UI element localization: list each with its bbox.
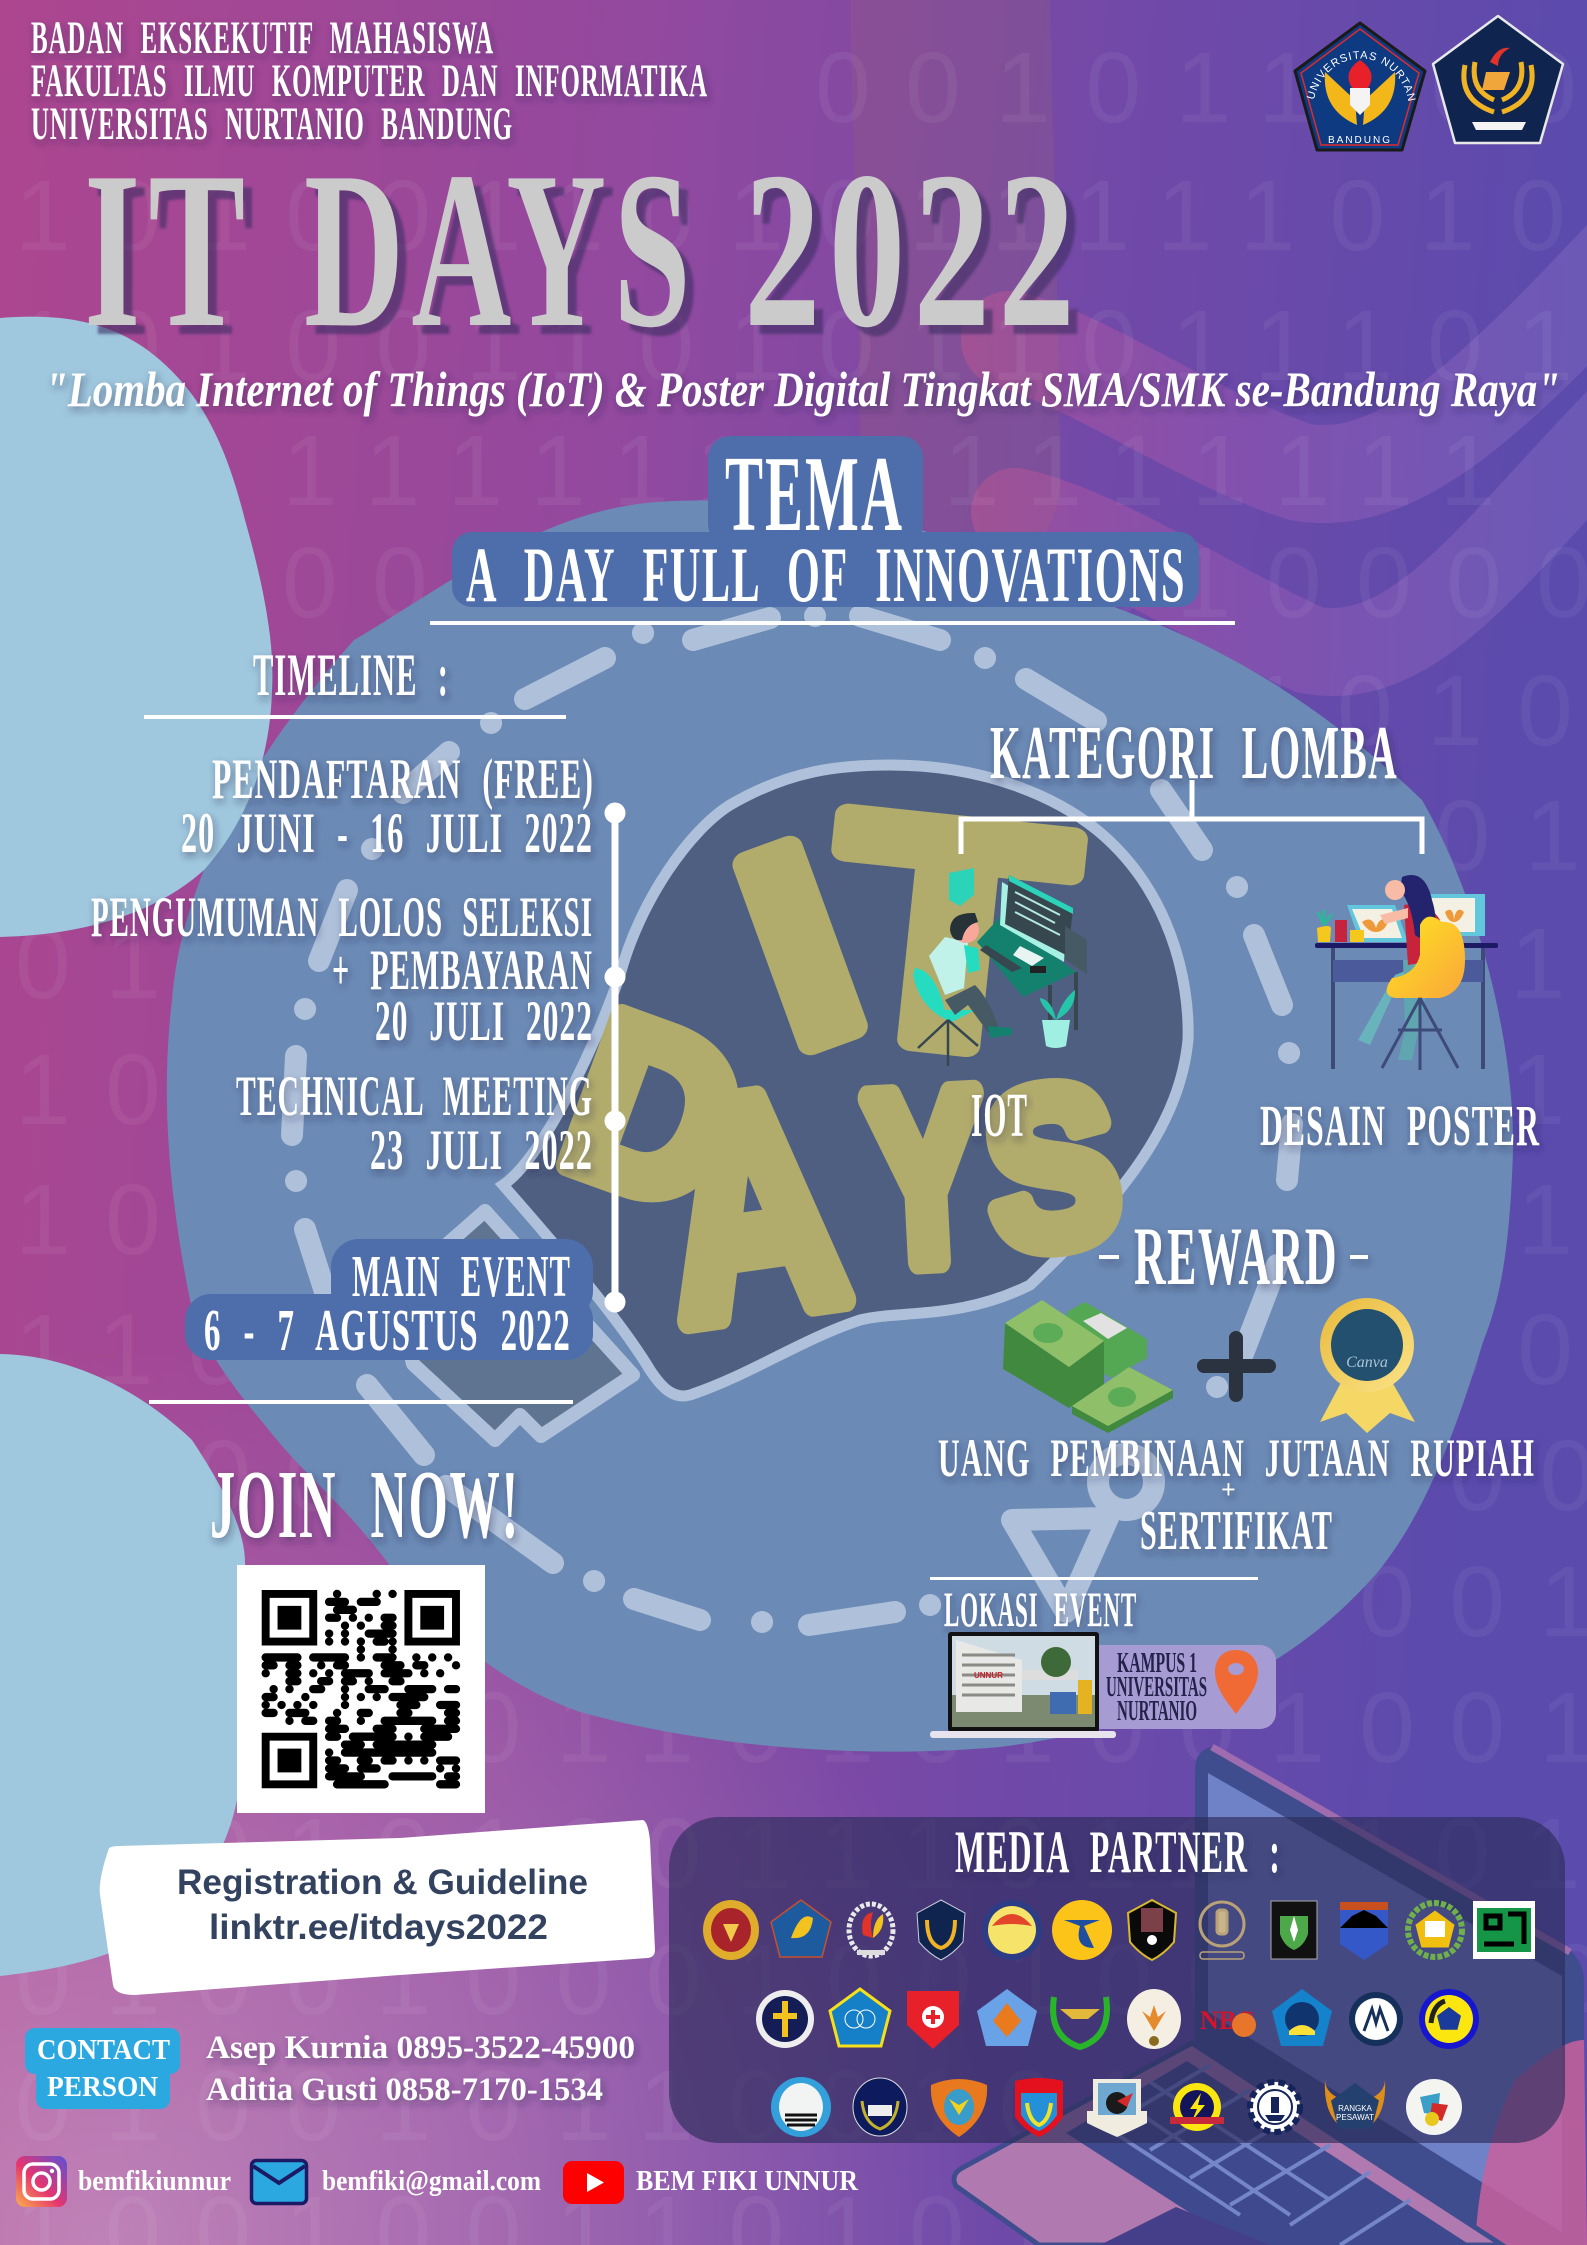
header organisation text: UNIVERSITAS NURTANIO BANDUNG bbox=[31, 98, 513, 150]
icon: certificate medal: Canva bbox=[1346, 1354, 1388, 1371]
location name: KAMPUS 1 bbox=[1117, 1647, 1197, 1679]
panel: media partner bbox=[669, 1817, 1565, 2143]
IT DAYS logo lettering: D bbox=[536, 964, 774, 1260]
registration banner bbox=[100, 1820, 655, 1995]
background binary pattern: 010010110010110100 bbox=[15, 2050, 1587, 2162]
logo: blue ring stripes bbox=[771, 2077, 831, 2137]
logo: orange shield bbox=[931, 2079, 987, 2137]
background binary pattern: 101001101011011101 bbox=[15, 290, 1587, 402]
background binary pattern: 101101001101001111 bbox=[15, 1034, 1587, 1146]
logo: yellow circle bbox=[1052, 1900, 1112, 1960]
dashed circle with arrow bbox=[292, 616, 1292, 1625]
main event badge: MAIN EVENT bbox=[352, 1243, 571, 1309]
IT DAYS logo lettering: I bbox=[707, 786, 894, 1105]
contact names and numbers bbox=[206, 2030, 635, 2108]
reward description bbox=[938, 1428, 1535, 1562]
category bracket bbox=[961, 780, 1422, 854]
logo: white laurel bbox=[849, 1904, 893, 1956]
youtube channel: BEM FIKI UNNUR bbox=[636, 2166, 859, 2197]
main title bbox=[84, 126, 1083, 374]
logo: NBC basketball: NBC bbox=[1200, 2006, 1255, 2035]
technical meeting dates: TECHNICAL MEETING bbox=[236, 1065, 593, 1128]
background binary pattern: 101001101011111010 bbox=[15, 160, 1587, 272]
logo: himapala blue bbox=[1340, 1902, 1388, 1960]
IT DAYS logo lettering: Y bbox=[861, 1042, 989, 1316]
logo: white M circle bbox=[1349, 1992, 1403, 2046]
contact names and numbers: Asep Kurnia 0895-3522-45900 bbox=[206, 2030, 635, 2066]
background binary pattern: 101001010110100001 bbox=[15, 1546, 1587, 1658]
big blue blob bbox=[167, 500, 1513, 1752]
icon: map pin bbox=[1215, 1650, 1258, 1714]
location laptop photo: UNNUR bbox=[974, 1671, 1003, 1680]
icon: youtube bbox=[563, 2161, 624, 2204]
logo: yellow sun crest bbox=[982, 1900, 1042, 1960]
location name: UNIVERSITAS bbox=[1106, 1671, 1207, 1703]
partner logos row 2 bbox=[756, 1989, 1479, 2049]
logo: black music shield bbox=[1128, 1900, 1176, 1960]
logo: blue pentagon bbox=[771, 1900, 831, 1957]
theme label: TEMA bbox=[725, 435, 904, 554]
partner logos row 3 bbox=[771, 2077, 1462, 2137]
timeline panel bbox=[91, 642, 626, 1363]
logo: rangka pesawat wings: RANGKA bbox=[1338, 2104, 1373, 2113]
IT DAYS logo lettering bbox=[536, 748, 1129, 1387]
logo: green laurel wings bbox=[1053, 1997, 1107, 2047]
lightbulb base bbox=[395, 1211, 633, 1440]
registration text: Registration & Guideline bbox=[177, 1863, 588, 1902]
logo: yellow blue circle bbox=[1419, 1989, 1479, 2049]
logo: green square bbox=[1473, 1901, 1535, 1959]
header organisation text: BADAN EKSKEKUTIF MAHASISWA bbox=[31, 12, 494, 64]
background binary pattern: 010100110101001001 bbox=[15, 1672, 1587, 1784]
main event badge: 6 - 7 AGUSTUS 2022 bbox=[204, 1297, 571, 1363]
icon: certificate medal bbox=[1320, 1298, 1415, 1433]
icon: email envelope bbox=[252, 2160, 306, 2204]
background wave bands bbox=[950, 0, 1587, 652]
background binary pattern: 110010110011010101 bbox=[15, 780, 1587, 892]
logo: blue pentagon yellow book bbox=[1272, 1989, 1332, 2046]
background binary pattern: 100101001110110101 bbox=[15, 1798, 1587, 1910]
background binary pattern: 011010010110101111 bbox=[15, 908, 1587, 1020]
registration link: linktr.ee/itdays2022 bbox=[209, 1908, 548, 1947]
logo: tan microphone bbox=[1200, 1902, 1244, 1959]
icon: programmer at desk bbox=[913, 868, 1087, 1066]
instagram handle: bemfikiunnur bbox=[78, 2166, 231, 2197]
QR code bbox=[237, 1565, 485, 1813]
icon: plus sign bbox=[1204, 1338, 1269, 1395]
logo: Universitas Nurtanio crest: BANDUNG bbox=[1328, 135, 1392, 146]
announcement dates bbox=[91, 886, 593, 1053]
logo: himapala black bbox=[1271, 1901, 1317, 1959]
background binary pattern: 010010110100100100 bbox=[15, 1420, 1587, 1532]
location laptop photo bbox=[930, 1632, 1116, 1738]
reward description: SERTIFIKAT bbox=[1140, 1500, 1333, 1562]
background binary pattern: 110011010011100000 bbox=[15, 1294, 1587, 1406]
reward heading: REWARD bbox=[1134, 1210, 1338, 1302]
logo: red medical bbox=[907, 1991, 959, 2049]
icon: designer at desk bbox=[1315, 875, 1498, 1070]
announcement dates: 20 JULI 2022 bbox=[375, 990, 593, 1053]
lightbulb body bbox=[503, 765, 1188, 1396]
reward description: + bbox=[1221, 1475, 1236, 1504]
registration dates: PENDAFTARAN (FREE) bbox=[212, 748, 594, 811]
logo: rangka pesawat wings bbox=[1325, 2079, 1385, 2129]
light blue blob bottom left bbox=[0, 1354, 247, 1976]
icon: money stacks bbox=[1003, 1300, 1173, 1433]
technical meeting dates: 23 JULI 2022 bbox=[370, 1119, 593, 1182]
registration dates bbox=[181, 748, 594, 865]
laptop illustration bottom right bbox=[954, 1747, 1587, 2245]
background binary pattern: 100110100110110011 bbox=[15, 1164, 1587, 1276]
media partner heading: MEDIA PARTNER : bbox=[955, 1819, 1281, 1885]
logo: yellow blue pentagon bbox=[830, 1989, 890, 2046]
logo: navy cross bbox=[756, 1990, 814, 2048]
text: IOT bbox=[971, 1082, 1028, 1150]
contact person badge: CONTACT bbox=[37, 2034, 170, 2066]
logo: avionics lightning bbox=[1170, 2083, 1224, 2131]
email address: bemfiki@gmail.com bbox=[322, 2166, 541, 2197]
location card bbox=[930, 1632, 1276, 1738]
logo: white futsal bbox=[1127, 1989, 1181, 2049]
location name: NURTANIO bbox=[1117, 1695, 1197, 1727]
background binary pattern: 001001100010000 bbox=[282, 527, 1587, 639]
IT DAYS logo lettering: T bbox=[815, 748, 1085, 1122]
logo: Fakultas Ilmu Komputer crest bbox=[1433, 16, 1563, 143]
theme badge bbox=[452, 435, 1199, 618]
logo: Universitas Nurtanio crest bbox=[1294, 22, 1426, 152]
main event badge bbox=[185, 1239, 593, 1363]
main title: DAYS bbox=[304, 126, 698, 374]
background binary pattern: 111111111111111 bbox=[282, 415, 1530, 527]
contact person badge: PERSON bbox=[47, 2071, 158, 2103]
logo: white music circle bbox=[1406, 2079, 1462, 2135]
logo: navy oval book bbox=[853, 2078, 907, 2136]
icon: instagram bbox=[16, 2156, 67, 2207]
announcement dates: PENGUMUMAN LOLOS SELEKSI bbox=[91, 886, 593, 949]
partner logos row 1 bbox=[703, 1900, 1535, 1960]
logo: green yellow laurel bbox=[1408, 1903, 1462, 1957]
registration dates: 20 JUNI - 16 JULI 2022 bbox=[181, 802, 593, 865]
main title: IT bbox=[84, 126, 253, 374]
location name bbox=[1106, 1647, 1207, 1727]
reward heading bbox=[1099, 1210, 1368, 1302]
join now heading: JOIN NOW! bbox=[210, 1451, 520, 1558]
timeline heading: TIMELINE : bbox=[253, 642, 449, 708]
timeline vertical line with dots bbox=[604, 802, 626, 1312]
header organisation text bbox=[31, 12, 708, 150]
announcement dates: + PEMBAYARAN bbox=[332, 939, 593, 1002]
logo: turbine shield bbox=[1087, 2079, 1147, 2137]
main title: 2022 bbox=[744, 126, 1083, 374]
background binary pattern: 010110011101011010 bbox=[15, 655, 1587, 767]
IT DAYS logo lettering: S bbox=[975, 1038, 1129, 1297]
location card background bbox=[1080, 1645, 1276, 1729]
logo: red crest bbox=[703, 1900, 759, 1960]
text: LOKASI EVENT bbox=[944, 1581, 1137, 1637]
contact person badge bbox=[25, 2028, 180, 2109]
light blue blob top left bbox=[0, 317, 272, 937]
logo: red blue shield bbox=[1015, 2078, 1063, 2137]
technical meeting dates bbox=[236, 1065, 593, 1182]
contact names and numbers: Aditia Gusti 0858-7170-1534 bbox=[206, 2072, 603, 2108]
logo: rangka pesawat wings: PESAWAT bbox=[1336, 2113, 1374, 2122]
logo: navy faculty shield bbox=[917, 1900, 965, 1960]
header organisation text: FAKULTAS ILMU KOMPUTER DAN INFORMATIKA bbox=[31, 55, 708, 107]
logo: blue pentagon orange bbox=[977, 1989, 1037, 2046]
IT DAYS logo lettering: A bbox=[643, 1024, 861, 1387]
logo: gear circle bbox=[1250, 2082, 1300, 2132]
